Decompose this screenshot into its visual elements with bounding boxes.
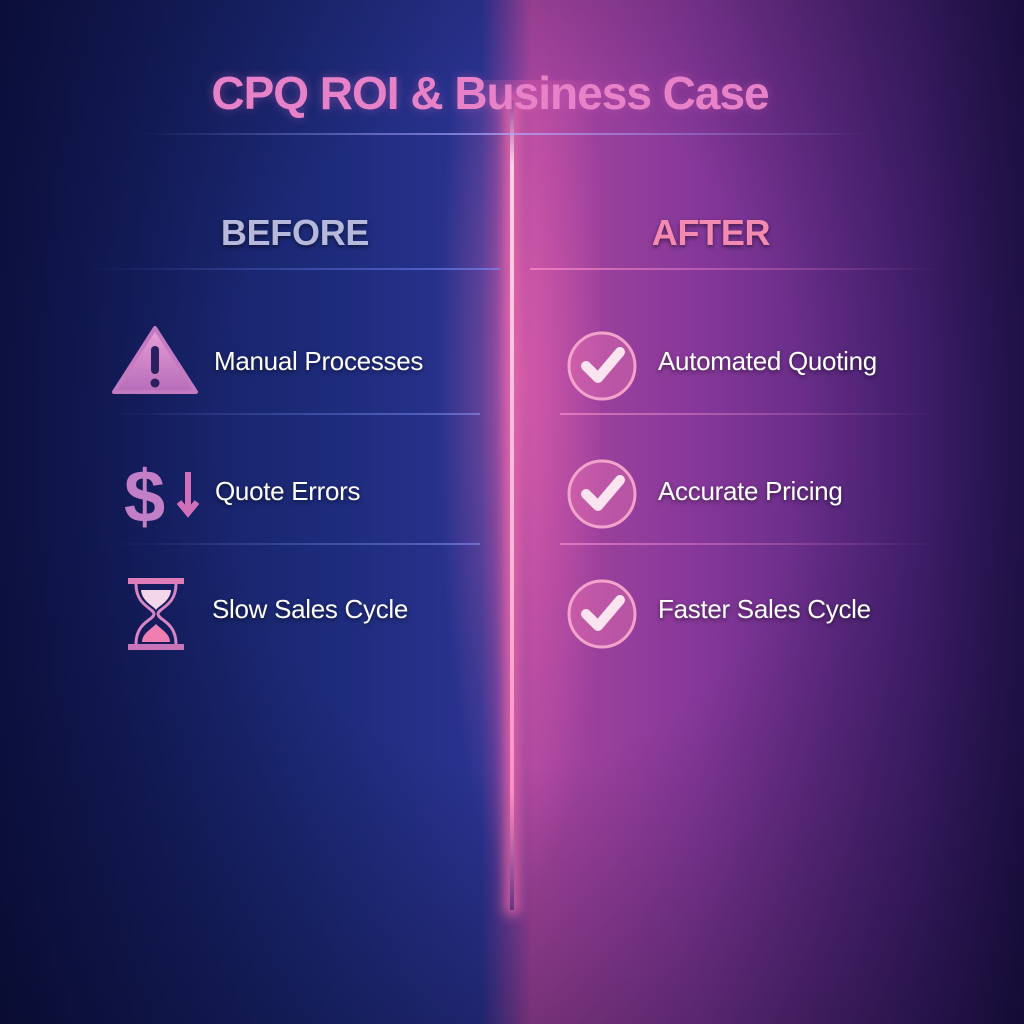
icon: check 2 [568,460,636,528]
icon: check 3 [568,580,636,648]
text: faster sales cycle: Faster Sales Cycle [658,594,871,624]
icon: warning [112,326,198,394]
text: quote errors: Quote Errors [215,476,360,506]
icon: hourglass [128,578,184,650]
center glow divider [430,80,600,940]
panel: after items [568,332,878,648]
title: CPQ ROI & Business Case [211,67,769,119]
heading: before: BEFORE [221,212,369,253]
text: manual processes: Manual Processes [214,346,423,376]
text: automated quoting: Automated Quoting [658,346,877,376]
heading: after: AFTER [652,212,770,253]
text: slow sales cycle: Slow Sales Cycle [212,594,408,624]
icon: dollar down [124,455,200,534]
icon: check 1 [568,332,636,400]
panel: before items [112,326,424,650]
text: accurate pricing: Accurate Pricing [658,476,842,506]
